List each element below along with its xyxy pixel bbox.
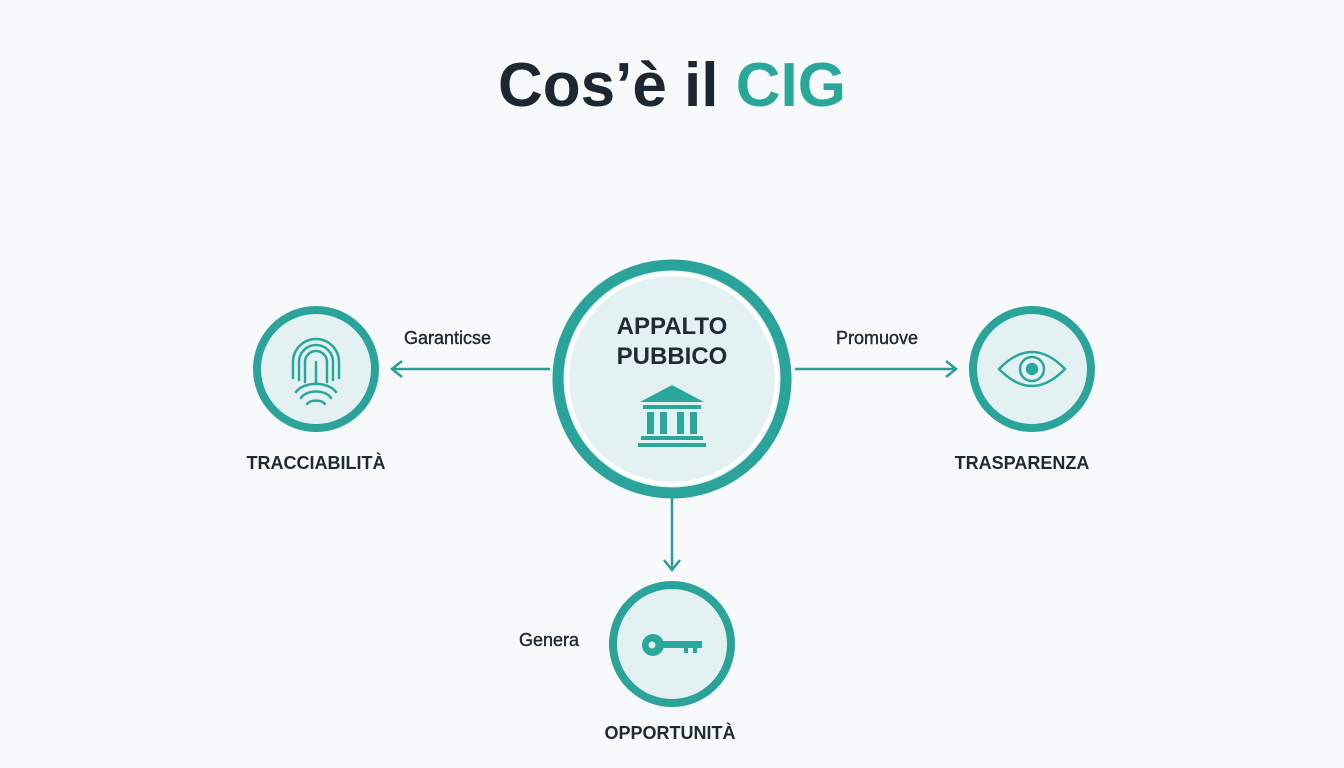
center label xyxy=(617,313,727,370)
right circle xyxy=(973,310,1091,428)
arrow: left xyxy=(392,361,550,377)
icon: key xyxy=(642,634,702,656)
label: TRASPARENZA: TRASPARENZA xyxy=(955,453,1089,473)
title: Cos’è il CIG xyxy=(498,51,846,120)
label: Genera: Genera xyxy=(519,630,579,650)
arrow: right xyxy=(795,361,956,377)
bottom circle xyxy=(613,585,731,703)
icon: bank xyxy=(638,385,706,447)
icon: fingerprint xyxy=(293,339,339,404)
icon: eye xyxy=(999,352,1065,386)
label: OPPORTUNITÀ: OPPORTUNITÀ xyxy=(604,723,736,743)
left circle xyxy=(257,310,375,428)
arrow: down xyxy=(664,497,680,570)
center label: APPALTO xyxy=(617,313,727,340)
center circle xyxy=(558,265,786,493)
label: Promuove: Promuove xyxy=(836,328,918,348)
center label: PUBBICO xyxy=(617,343,727,370)
label: Garanticse: Garanticse xyxy=(404,328,491,348)
label: TRACCIABILITÀ: TRACCIABILITÀ xyxy=(246,453,385,473)
